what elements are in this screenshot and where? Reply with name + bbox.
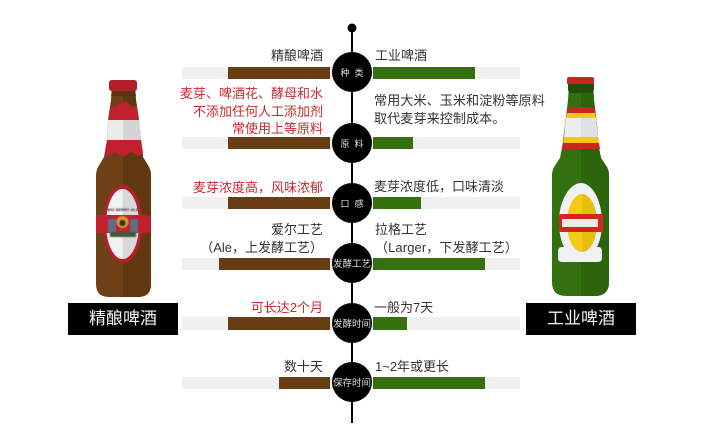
row: fermentation time bars	[182, 317, 520, 330]
text: craft fermentation time: 可长达2个月	[251, 300, 323, 315]
circle label: ingredients: 原 料	[340, 138, 364, 149]
circle label: fermentation process	[332, 243, 372, 283]
central timeline	[348, 24, 356, 423]
circle label: fermentation process: 发酵工艺	[333, 258, 371, 270]
text: craft taste: 麦芽浓度高，风味浓郁	[193, 180, 323, 195]
text: industrial fermentation time: 一般为7天	[374, 300, 433, 315]
tag: craft beer	[68, 303, 178, 335]
text: craft process	[200, 222, 323, 255]
lager bottle	[552, 77, 609, 296]
circle label: fermentation time: 发酵时间	[333, 318, 371, 330]
circle label: taste	[332, 183, 372, 223]
circle label: ingredients	[332, 123, 372, 163]
text: craft ingredients	[180, 86, 323, 136]
row: storage time bars	[182, 377, 520, 389]
circle label: storage time	[332, 362, 372, 402]
text: industrial process	[375, 222, 518, 255]
label: type industrial: 工业啤酒	[375, 48, 427, 63]
text: industrial ingredients	[374, 93, 545, 126]
label: type craft: 精酿啤酒	[271, 48, 323, 63]
tag: craft beer: 精酿啤酒	[89, 309, 157, 328]
circle label: fermentation time	[332, 303, 372, 343]
text: craft ingredients: 常使用上等原料	[232, 121, 323, 136]
row: type bars	[182, 67, 520, 79]
text: industrial taste: 麦芽浓度低，口味清淡	[374, 179, 504, 194]
row: taste bars	[182, 197, 520, 209]
row: ingredients bars	[182, 137, 520, 149]
text: industrial ingredients: 常用大米、玉米和淀粉等原料	[374, 93, 545, 108]
circle label: type	[332, 52, 372, 92]
text: craft process: （Ale，上发酵工艺）	[200, 240, 323, 255]
tag: industrial beer	[526, 303, 636, 335]
text: craft process: 爱尔工艺	[271, 222, 323, 237]
tag: industrial beer: 工业啤酒	[547, 309, 615, 328]
circle label: type: 种 类	[340, 67, 364, 78]
text: industrial ingredients: 取代麦芽来控制成本。	[374, 110, 505, 126]
text: craft ingredients: 不添加任何人工添加剂	[193, 104, 323, 118]
text: industrial process: 拉格工艺	[375, 222, 427, 237]
craft beer bottle: BIG BERRY ALE	[108, 207, 139, 212]
text: craft ingredients: 麦芽、啤酒花、酵母和水	[180, 86, 323, 101]
circle label: taste: 口 感	[340, 198, 364, 209]
text: craft storage: 数十天	[284, 359, 323, 374]
craft beer bottle	[96, 80, 151, 297]
text: industrial process: （Larger，下发酵工艺）	[375, 240, 518, 255]
circle label: storage time: 保存时间	[333, 377, 371, 389]
row: fermentation process bars	[182, 258, 520, 270]
text: industrial storage: 1~2年或更长	[375, 359, 449, 374]
